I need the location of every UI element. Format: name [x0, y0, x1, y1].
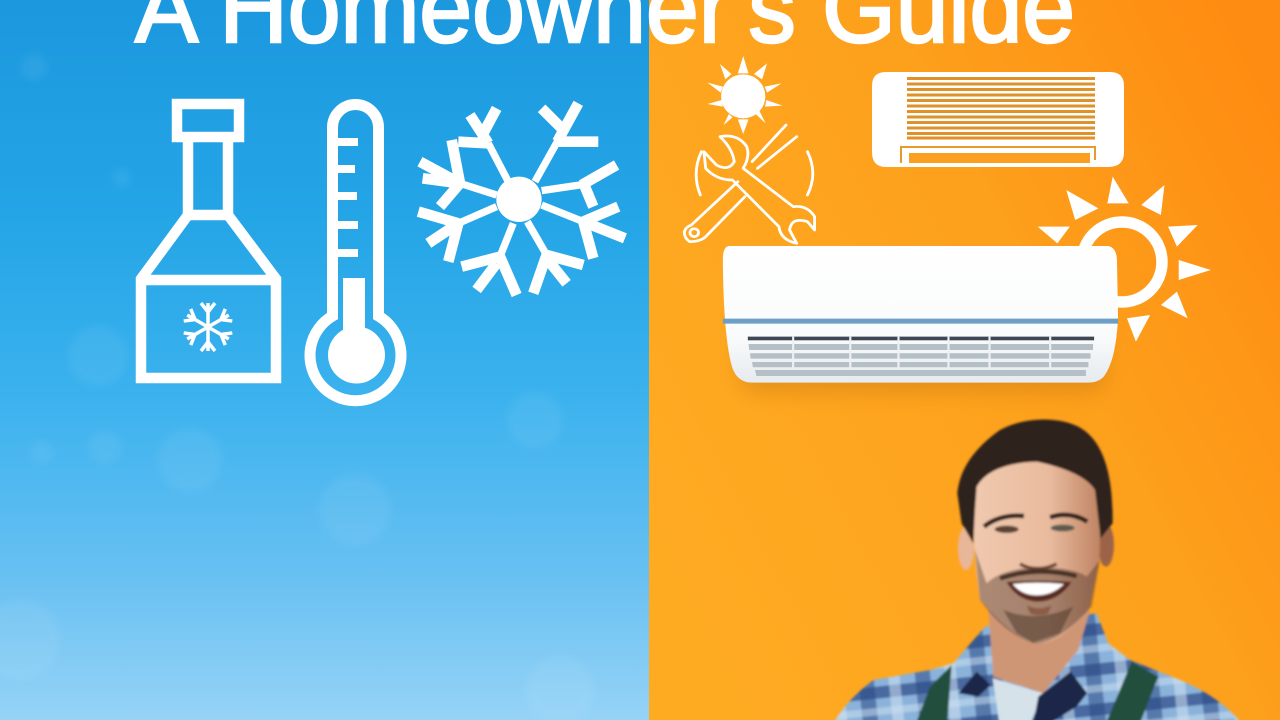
icon: small sun	[707, 56, 782, 134]
icon: large sun	[1038, 177, 1211, 342]
neck	[988, 610, 1090, 693]
straps	[916, 662, 1158, 720]
moustache	[1000, 572, 1077, 578]
panel: cold side background	[0, 0, 649, 720]
brows	[984, 515, 1087, 527]
panel: warm side background	[649, 0, 1280, 720]
icon: upper air conditioner	[872, 72, 1124, 167]
icon: refrigerant bottle	[141, 104, 276, 378]
mouth	[1007, 581, 1072, 602]
collar shadow	[958, 672, 1087, 720]
icon: main air conditioner	[723, 246, 1118, 392]
face	[973, 462, 1100, 643]
shirt	[833, 613, 1242, 720]
icon: snowflake	[418, 103, 625, 295]
nose	[1020, 564, 1057, 569]
chin patch	[1027, 605, 1052, 615]
icon: crossed tools	[684, 125, 815, 243]
undershirt	[993, 678, 1043, 720]
eyes	[995, 526, 1019, 533]
hair	[957, 419, 1113, 543]
photo: smiling technician	[833, 419, 1242, 720]
icon: thermometer	[310, 105, 401, 401]
ears	[958, 527, 974, 570]
beard	[975, 550, 1100, 643]
chin beard	[1003, 607, 1073, 643]
